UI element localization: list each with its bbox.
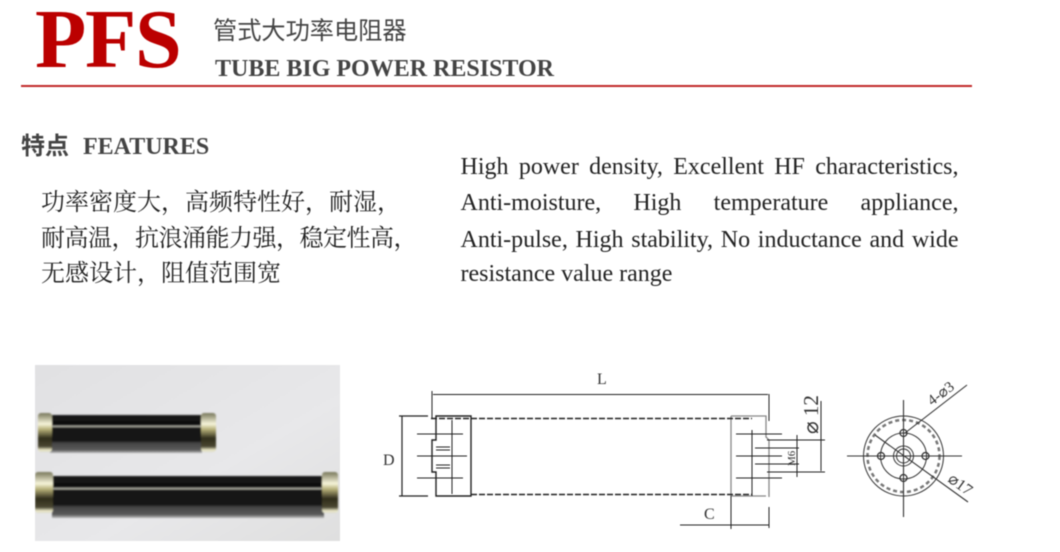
short resistor: [38, 413, 216, 453]
text block: Chinese features: [41, 188, 417, 287]
end cap left: [432, 416, 471, 496]
diagram: side view with dimensions: [399, 391, 825, 529]
inner details right: [736, 430, 799, 496]
diagram: end view: [847, 385, 968, 517]
heading: English product name: TUBE BIG POWER RESISTOR: [215, 56, 554, 82]
text block: Chinese features: 耐高温，抗浪涌能力强，稳定性高，: [41, 226, 417, 252]
tube body dashed: [431, 418, 752, 494]
features label Chinese: 特点: [21, 133, 69, 160]
photo: two tube resistors: [35, 365, 340, 541]
text block: Chinese features: 功率密度大，高频特性好，耐湿，: [41, 190, 401, 216]
text block: Chinese features: 无感设计，阻值范围宽: [41, 261, 281, 287]
heading: Chinese product name: 管式大功率电阻器: [213, 18, 407, 45]
text block: English features: Anti-moisture, High temperature appliance,: [460, 190, 958, 216]
inner details left: [417, 420, 467, 494]
label: L: L: [597, 371, 607, 388]
label: 4-⌀3: 4-⌀3: [925, 379, 958, 409]
header divider: [21, 84, 972, 86]
text block: English features: resistance value range: [460, 261, 672, 287]
label: D: D: [383, 452, 395, 469]
label: diameter 12: ⌀ 12: [799, 395, 823, 434]
long resistor: [35, 472, 338, 518]
D dimension: [399, 416, 428, 496]
outer circles: [864, 416, 944, 496]
C dimension: [680, 496, 769, 529]
label: C: C: [704, 506, 715, 523]
features label English: FEATURES: [83, 134, 209, 160]
text block: English features: Anti-pulse, High stability, No inductance and wide: [460, 227, 958, 253]
label: ⌀17: ⌀17: [945, 470, 975, 499]
L dimension: [432, 391, 769, 421]
heading: features: [21, 132, 209, 160]
bolt holes: [878, 430, 929, 482]
label: M6: M6: [786, 450, 798, 466]
dimension lines right: [767, 401, 825, 477]
text block: English features: [460, 154, 958, 287]
end cap right: [731, 416, 769, 497]
text block: English features: High power density, Excellent HF characteristics,: [460, 154, 958, 180]
centre lines and leaders: [847, 385, 968, 517]
